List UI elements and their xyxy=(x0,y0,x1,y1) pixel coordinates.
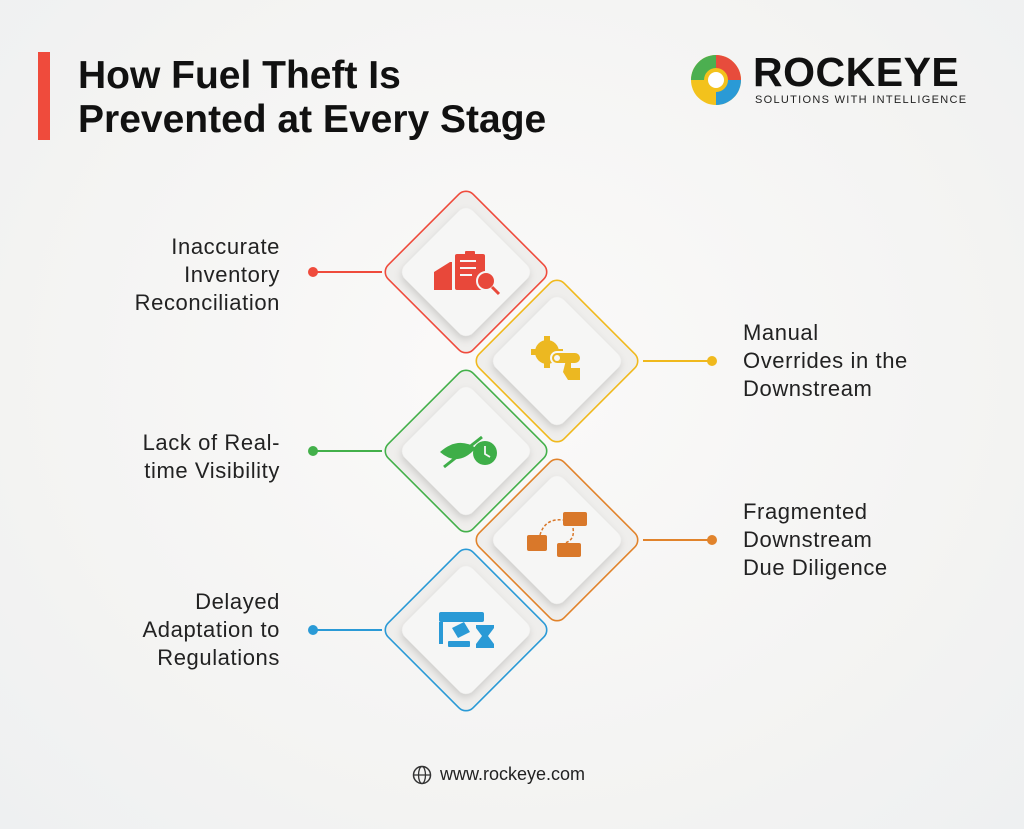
icon: puzzle pieces xyxy=(527,512,587,557)
label: lack of visibility: Lack of Real- xyxy=(143,430,280,455)
label: inaccurate inventory: Inaccurate xyxy=(171,234,280,259)
label: inaccurate inventory xyxy=(135,234,280,315)
title xyxy=(78,54,546,141)
label: lack of visibility xyxy=(143,430,280,483)
label: fragmented: Due Diligence xyxy=(743,555,888,580)
title: Prevented at Every Stage xyxy=(78,98,546,141)
title accent bar xyxy=(38,52,50,140)
icon: eye slash clock xyxy=(440,437,497,467)
title: How Fuel Theft Is xyxy=(78,54,401,97)
diamond: red xyxy=(381,187,551,357)
label: delayed adaptation: Delayed xyxy=(195,589,280,614)
icon: gear toggle xyxy=(531,336,581,380)
label: fragmented: Downstream xyxy=(743,527,872,552)
logo: SOLUTIONS WITH INTELLIGENCE xyxy=(755,94,967,106)
icon: warehouse checklist xyxy=(434,251,499,294)
label: manual overrides: Overrides in the xyxy=(743,348,908,373)
label: delayed adaptation xyxy=(142,589,280,670)
label: lack of visibility: time Visibility xyxy=(144,458,280,483)
label: fragmented xyxy=(743,499,888,580)
diamond: green xyxy=(381,366,551,536)
logo xyxy=(691,49,967,106)
label: delayed adaptation: Regulations xyxy=(157,645,280,670)
label: inaccurate inventory: Reconciliation xyxy=(135,290,280,315)
logo: ROCKEYE xyxy=(753,49,959,95)
label: manual overrides xyxy=(743,320,908,401)
icon: calendar gavel hourglass xyxy=(439,612,494,648)
diamond: yellow xyxy=(472,276,642,446)
footer website: www.rockeye.com xyxy=(440,764,585,784)
diamond: blue xyxy=(381,545,551,715)
label: manual overrides: Manual xyxy=(743,320,819,345)
label: manual overrides: Downstream xyxy=(743,376,872,401)
connector lines xyxy=(308,267,717,635)
label: inaccurate inventory: Inventory xyxy=(184,262,280,287)
label: delayed adaptation: Adaptation to xyxy=(143,617,280,642)
diamond: orange xyxy=(472,455,642,625)
label: fragmented: Fragmented xyxy=(743,499,868,524)
